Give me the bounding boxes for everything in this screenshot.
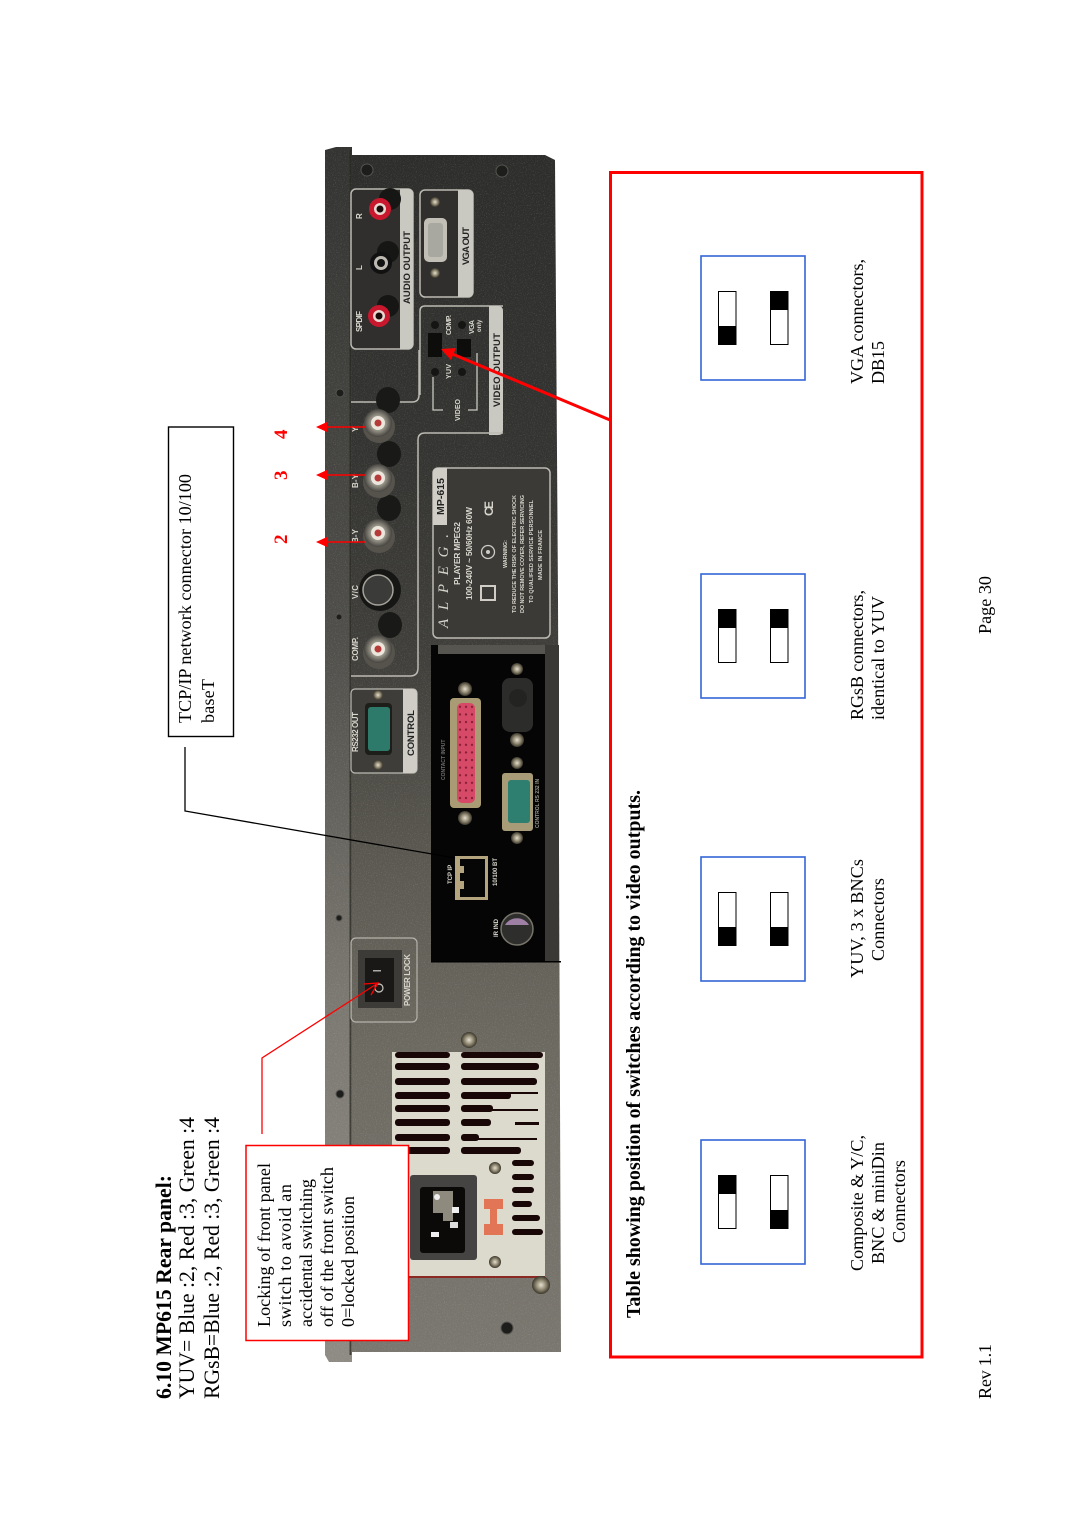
audio output panel: L [355, 265, 364, 270]
power lock switch: POWER LOCK [403, 954, 412, 1006]
video output panel with switches: COMP. [446, 315, 453, 335]
RJ45 network connector: 10/100 BT [493, 858, 499, 886]
video output panel with switches: VGA [469, 320, 476, 334]
callout: TCP/IP network connector [168, 427, 234, 736]
green DB9 control connector [502, 757, 541, 844]
caption: composite and Y/C: Connectors [889, 1160, 909, 1243]
caption: VGA [847, 259, 888, 384]
video connectors: BNC and S-video: V/C [351, 585, 360, 599]
switch diagram: RGsB [701, 574, 805, 698]
caption: composite and Y/C [847, 1135, 909, 1271]
video output panel with switches: VIDEO [455, 398, 462, 421]
grill slots [395, 1052, 543, 1235]
caption: composite and Y/C: BNC & miniDin [868, 1142, 888, 1264]
mouse style round connector [494, 913, 533, 945]
video connectors: BNC and S-video: B-Y [351, 528, 360, 543]
VGA out panel: VGA OUT [461, 227, 472, 265]
video output panel with switches [351, 306, 503, 676]
dark round-shell connector [502, 663, 533, 747]
plate screws [461, 1032, 550, 1294]
mounting holes [336, 164, 513, 1334]
green DB9 control connector: CONTROL RS 232 IN [535, 779, 541, 828]
title block: MP615 rear panel [152, 1117, 224, 1399]
DB25 contact input connector [441, 682, 481, 825]
video output panel with switches: VIDEO OUTPUT [492, 333, 503, 407]
video output panel with switches: YUV [446, 364, 453, 379]
table heading: Table showing position of switches according to video outputs. [623, 790, 645, 1318]
callout: TCP/IP network connector: baseT [198, 679, 218, 723]
caption: YUV: Connectors [868, 878, 888, 961]
RJ45 network connector: TCP IP [448, 865, 454, 884]
video connectors: BNC and S-video [351, 387, 402, 669]
callout: locking of front panel switch: accidental switching [296, 1179, 316, 1327]
caption: VGA: VGA connectors, [847, 259, 867, 384]
callout: locking of front panel switch: off of the front switch [317, 1167, 337, 1327]
title block: MP615 rear panel: RGsB=Blue :2, Red :3, Green :4 [200, 1117, 224, 1399]
callout: locking of front panel switch: 0=locked position [338, 1196, 358, 1327]
callout: locking of front panel switch: switch to avoid an [275, 1184, 295, 1327]
product label plate MP-615: CE [482, 501, 496, 516]
product label plate MP-615: MP-615 [435, 478, 447, 515]
red arrow to video output switches [441, 348, 610, 420]
audio output panel: R [355, 213, 364, 219]
product label plate MP-615 [433, 468, 550, 638]
DB25 contact input connector: CONTACT INPUT [441, 740, 447, 780]
connector numbers 2 3 4 [271, 429, 292, 544]
orange H logo [484, 1199, 503, 1235]
callout: locking of front panel switch: Locking of front panel [254, 1163, 274, 1327]
page number: Page 30 [975, 576, 995, 634]
rear panel photo of MP615 [320, 140, 565, 1365]
caption: RGsB: identical to YUV [868, 596, 888, 720]
product label plate MP-615: DO NOT REMOVE COVER, REFER SERVICING [520, 495, 526, 613]
RJ45 network connector [448, 856, 499, 900]
ventilation grill plate [392, 1032, 550, 1294]
red arrows to BNC connectors [316, 422, 365, 547]
title block: MP615 rear panel: YUV= Blue :2, Red :3, Green :4 [175, 1117, 199, 1399]
audio output panel [351, 188, 413, 349]
product label plate MP-615: TO QUALIFIED SERVICE PERSONNEL [529, 499, 535, 603]
black connector plate [431, 645, 561, 962]
VGA out panel [420, 190, 473, 297]
switch diagram: YUV [701, 857, 805, 981]
red leader line to power lock switch [262, 983, 378, 1134]
switch diagram: composite and Y/C [701, 1140, 805, 1264]
power lock switch [351, 938, 417, 1022]
caption: composite and Y/C: Composite & Y/C, [847, 1135, 867, 1271]
power socket [410, 1175, 477, 1260]
video output panel with switches: only [477, 319, 483, 332]
panel: table of switch positions [610, 172, 922, 1357]
product label plate MP-615: WARNING: [503, 540, 509, 568]
product label plate MP-615: TO REDUCE THE RISK OF ELECTRIC SHOCK [512, 495, 518, 613]
caption: YUV: YUV, 3 x BNCs [847, 859, 867, 978]
callout: locking of front panel switch [246, 1146, 408, 1340]
callout: TCP/IP network connector: TCP/IP network connector 10/100 [175, 474, 195, 723]
connector numbers 2 3 4: 3 [271, 470, 292, 480]
audio output panel: SPDIF [355, 311, 364, 332]
switch diagram: VGA [701, 256, 805, 380]
video connectors: BNC and S-video: COMP. [351, 637, 360, 661]
RS232 control panel [351, 689, 417, 773]
product label plate MP-615: MADE IN FRANCE [538, 530, 544, 580]
black leader line to network connector [185, 747, 455, 858]
video connectors: BNC and S-video: Y [351, 426, 360, 432]
product label plate MP-615: PLAYER MPEG2 [452, 522, 462, 585]
caption: RGsB [847, 590, 888, 720]
connector numbers 2 3 4: 4 [271, 429, 292, 439]
product label plate MP-615: 100-240V ~ 50/60Hz 60W [464, 506, 474, 600]
connector numbers 2 3 4: 2 [271, 534, 292, 544]
audio output panel: AUDIO OUTPUT [402, 231, 413, 304]
caption: YUV [847, 859, 888, 978]
video connectors: BNC and S-video: B-Y [351, 473, 360, 488]
caption: VGA: DB15 [868, 341, 888, 384]
product label plate MP-615: ALPEG. [436, 534, 452, 629]
mouse style round connector: IR IND [494, 918, 500, 937]
caption: RGsB: RGsB connectors, [847, 590, 867, 720]
title block: MP615 rear panel: 6.10 MP615 Rear panel: [152, 1175, 176, 1399]
revision footer: Rev 1.1 [975, 1344, 995, 1399]
RS232 control panel: RS232 OUT [351, 712, 360, 752]
RS232 control panel: CONTROL [406, 710, 417, 756]
